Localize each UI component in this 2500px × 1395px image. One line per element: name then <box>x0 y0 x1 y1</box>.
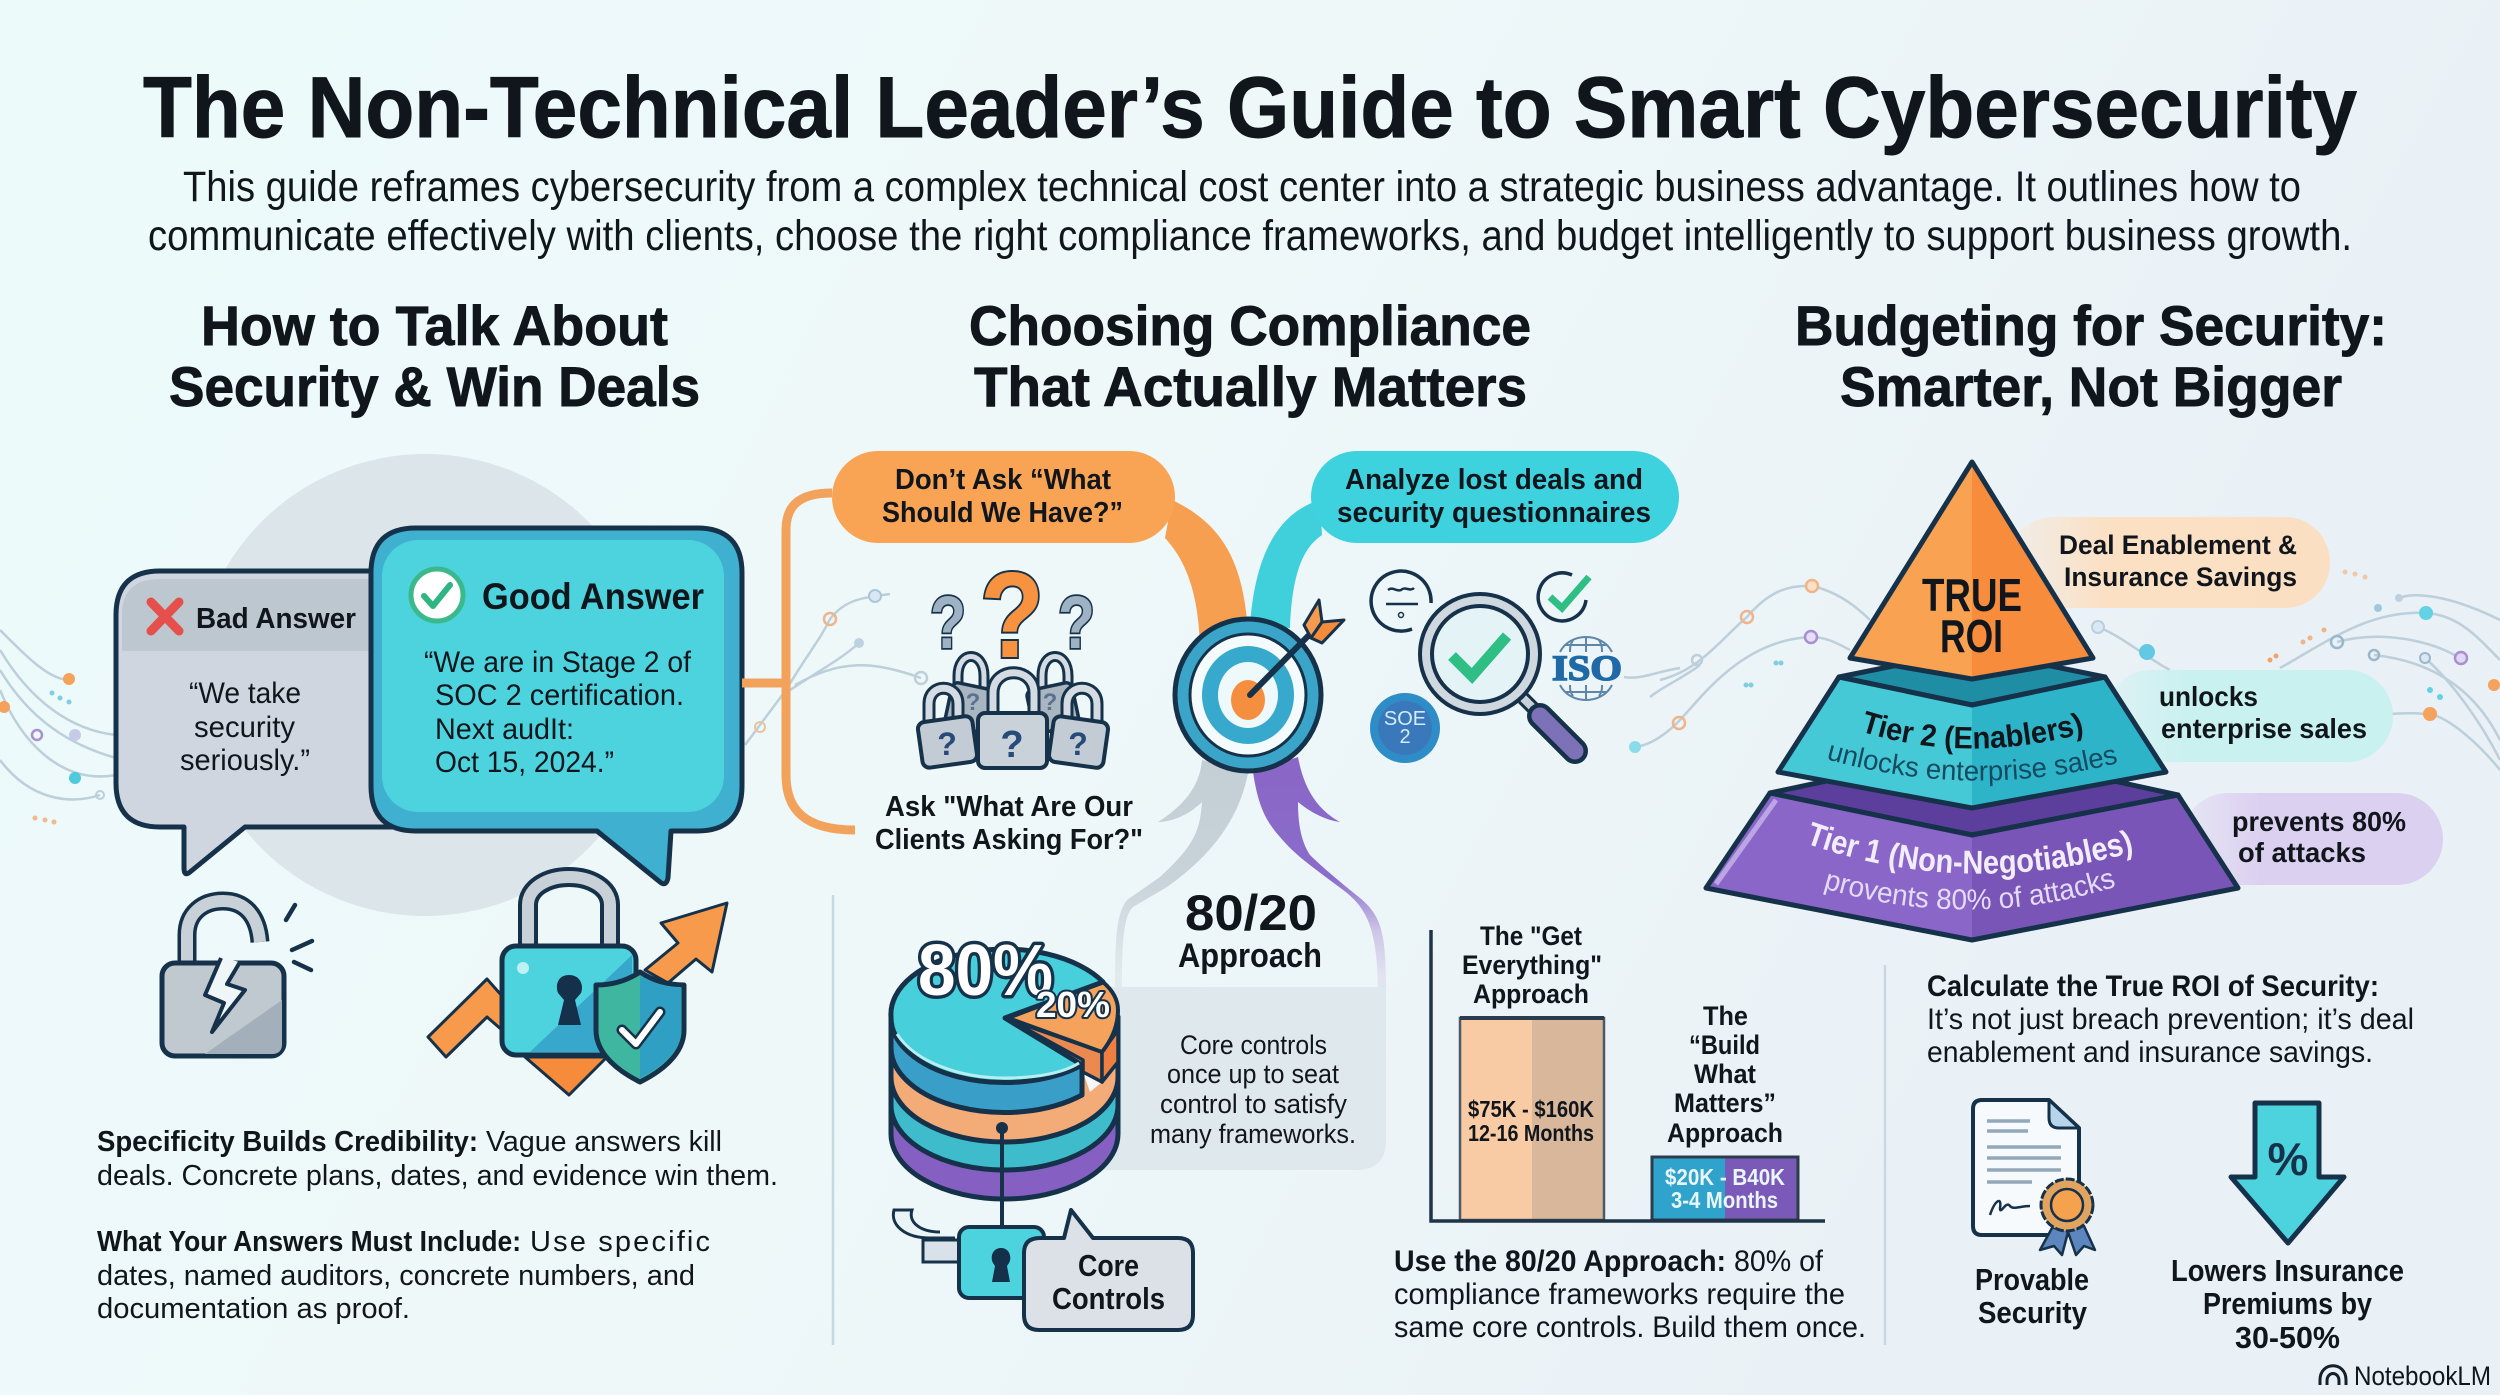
ribbon: orange to target <box>1165 500 1248 645</box>
bar: get everything: 12-16 Months <box>1468 1120 1594 1146</box>
top: true roi: TRUE <box>1922 569 2022 621</box>
icon: red x <box>151 602 179 631</box>
good answer quote <box>424 646 692 779</box>
label: build what matters <box>1667 1001 1783 1148</box>
icon: green check <box>411 569 463 621</box>
pill: don't ask: Don’t Ask “What <box>895 464 1111 496</box>
text block: use the 80/20 approach: compliance frameworks require the <box>1394 1278 1845 1311</box>
label: get everything: Everything" <box>1462 950 1602 980</box>
icon: magnifier with compliance badges: SOE <box>1384 708 1426 730</box>
ribbon: cyan to target <box>1250 500 1322 628</box>
icon: question marks and locks: ? <box>966 689 980 716</box>
pill: analyze lost deals <box>1311 451 1679 543</box>
pill: deal enablement: Insurance Savings <box>2064 562 2297 592</box>
tier 1: Tier 1 (Non-Negotiables) <box>1811 822 2132 880</box>
text block: specificity and answers: documentation as proof. <box>97 1293 410 1325</box>
pill: unlocks enterprise sales: enterprise sales <box>2161 713 2367 744</box>
arrow: orange bracket connector <box>742 493 855 830</box>
chart: security budget pyramid <box>1704 460 2240 942</box>
pill: prevents attacks: of attacks <box>2238 837 2366 868</box>
pill: unlocks enterprise sales <box>2105 670 2393 762</box>
text block: specificity and answers: dates, named auditors, concrete numbers, and <box>97 1260 695 1292</box>
heading: budgeting: Smarter, Not Bigger <box>1840 355 2342 418</box>
text block: calculate true roi: enablement and insurance savings. <box>1927 1036 2373 1069</box>
label: get everything <box>1462 921 1602 1009</box>
pill: prevents attacks: prevents 80% <box>2232 806 2406 837</box>
label: provable security <box>1975 1262 2089 1330</box>
80/20 heading: 80/20 <box>1185 885 1317 941</box>
label: lowers insurance premiums: 30-50% <box>2235 1320 2340 1355</box>
80% label: 80% <box>918 931 1053 1011</box>
heading: choosing compliance: That Actually Matters <box>974 355 1527 418</box>
icon: percent down arrow: % <box>2268 1133 2308 1185</box>
bad answer quote <box>180 677 310 777</box>
bar: build what matters: $20K - B40K <box>1665 1164 1785 1190</box>
bad answer quote: seriously.” <box>180 744 310 777</box>
80/20 description: many frameworks. <box>1150 1119 1356 1149</box>
icon: target with arrow <box>1175 600 1344 771</box>
top: true roi: ROI <box>1940 610 2003 662</box>
icon: question marks and locks: ? <box>1043 689 1057 716</box>
text block: specificity and answers: Specificity Builds Credibility: <box>97 1126 478 1158</box>
pill: analyze lost deals: Analyze lost deals and <box>1345 464 1643 496</box>
20% label: 20% <box>1036 984 1110 1025</box>
text block: specificity and answers: deals. Concrete plans, dates, and evidence win them. <box>97 1160 778 1192</box>
80/20 description: once up to seat <box>1167 1059 1339 1089</box>
icon: magnifier with compliance badges: ISO <box>1552 648 1622 688</box>
bad answer label: Bad Answer <box>196 603 356 635</box>
good answer quote: “We are in Stage 2 of <box>424 646 692 679</box>
icon: core controls lock and label: Controls <box>1052 1281 1165 1316</box>
divider lines <box>833 895 1885 1345</box>
label: ask what clients ask: Ask "What Are Our <box>885 791 1133 823</box>
label: get everything: Approach <box>1473 979 1589 1009</box>
icon: percent down arrow <box>2231 1103 2344 1243</box>
chart: approach cost comparison bars <box>1431 921 1825 1221</box>
panel: good answer bubble <box>371 528 742 884</box>
label: lowers insurance premiums <box>2171 1253 2404 1355</box>
heading: talk about security: How to Talk About <box>201 294 668 357</box>
ribbon: grey from target <box>1115 760 1248 987</box>
80/20 description: control to satisfy <box>1160 1089 1347 1119</box>
pill: deal enablement <box>2008 517 2330 608</box>
label: lowers insurance premiums: Premiums by <box>2203 1286 2373 1321</box>
panel: 80/20 approach card <box>1060 885 1386 1170</box>
tier 1: provents 80% of attacks <box>1823 872 2114 910</box>
icon: certified document <box>1973 1100 2095 1255</box>
pill: don't ask <box>832 451 1175 543</box>
80/20 description <box>1150 1030 1356 1149</box>
title: The Non-Technical Leader’s Guide to Smart Cybersecurity <box>143 60 2357 156</box>
text block: calculate true roi: Calculate the True ROI of Security: <box>1927 970 2379 1003</box>
label: ask what clients ask <box>875 791 1143 856</box>
backdrop circle <box>194 454 656 916</box>
label: provable security: Provable <box>1975 1262 2089 1297</box>
top: true roi <box>1850 462 2093 679</box>
bar: build what matters: 3-4 Months <box>1671 1187 1778 1213</box>
bar: get everything <box>1460 1018 1604 1220</box>
good answer quote: SOC 2 certification. <box>435 679 684 712</box>
icon: core controls lock and label <box>893 1122 1193 1330</box>
label: build what matters: “Build <box>1689 1030 1760 1060</box>
text block: specificity and answers: Use specific <box>530 1226 710 1258</box>
icon: question marks and locks <box>917 547 1109 769</box>
icon: question marks and locks: ? <box>937 726 957 762</box>
heading: choosing compliance: Choosing Compliance <box>969 294 1531 357</box>
good answer quote: Next audIt: <box>435 713 574 746</box>
label: build what matters: What <box>1694 1059 1756 1089</box>
icon: core controls lock and label: Core <box>1078 1248 1139 1283</box>
bar: get everything: $75K - $160K <box>1468 1096 1594 1122</box>
label: build what matters: The <box>1703 1001 1748 1031</box>
bad answer quote: security <box>194 711 295 744</box>
text block: specificity and answers <box>97 1126 778 1325</box>
text block: use the 80/20 approach: 80% of <box>1734 1245 1824 1278</box>
label: get everything: The "Get <box>1480 921 1582 951</box>
heading: talk about security: Security & Win Deals <box>169 355 700 418</box>
text block: use the 80/20 approach: Use the 80/20 Approach: <box>1394 1245 1726 1278</box>
heading: choosing compliance <box>969 294 1531 418</box>
intro paragraph: This guide reframes cybersecurity from a complex technical cost center into a strategic business advantage. It outlines how to <box>183 163 2301 211</box>
label: ask what clients ask: Clients Asking For?" <box>875 824 1143 856</box>
80/20 description: Core controls <box>1180 1030 1327 1060</box>
decorative network lines <box>0 570 2500 824</box>
heading: budgeting <box>1795 294 2387 418</box>
pill: unlocks enterprise sales: unlocks <box>2159 681 2258 712</box>
text block: use the 80/20 approach: same core controls. Build them once. <box>1394 1311 1866 1344</box>
icon: magnifier with compliance badges: 2 <box>1399 726 1411 748</box>
80/20 heading: Approach <box>1178 937 1322 975</box>
pill: prevents attacks <box>2182 793 2443 885</box>
icon: question marks and locks: ? <box>1000 724 1024 766</box>
icon: magnifier with compliance badges <box>1370 571 1622 763</box>
pill: deal enablement: Deal Enablement & <box>2059 530 2297 560</box>
icon: question marks and locks: ? <box>930 581 966 664</box>
bar: build what matters <box>1652 1157 1798 1220</box>
icon: secure lock with growth arrow and shield <box>428 877 727 1095</box>
icon: question marks and locks: ? <box>1058 581 1095 664</box>
pill: don't ask: Should We Have?” <box>882 497 1123 529</box>
80/20 heading <box>1178 885 1322 975</box>
label: build what matters: Approach <box>1667 1118 1783 1148</box>
label: provable security: Security <box>1978 1295 2088 1330</box>
ribbon: purple from target <box>1253 757 1386 987</box>
text block: specificity and answers: Vague answers kill <box>486 1126 722 1158</box>
heading: budgeting: Budgeting for Security: <box>1795 294 2387 357</box>
icon: broken lock <box>162 901 312 1056</box>
pill: analyze lost deals: security questionnaires <box>1337 497 1651 529</box>
chart: layered pie stack <box>891 931 1118 1199</box>
label: lowers insurance premiums: Lowers Insurance <box>2171 1253 2404 1288</box>
good answer quote: Oct 15, 2024.” <box>435 746 614 779</box>
text block: use the 80/20 approach <box>1394 1245 1866 1344</box>
icon: question marks and locks: ? <box>980 547 1044 683</box>
text block: calculate true roi <box>1927 970 2414 1069</box>
good answer label: Good Answer <box>482 576 704 617</box>
tier 1 <box>1704 781 2240 942</box>
panel: bad answer bubble <box>116 571 400 874</box>
icon: question marks and locks: ? <box>1068 726 1088 762</box>
tier 2 <box>1776 666 2168 810</box>
text block: calculate true roi: It’s not just breach prevention; it’s deal <box>1927 1003 2414 1036</box>
text block: specificity and answers: What Your Answers Must Include: <box>97 1226 521 1258</box>
tier 2: unlocks enterprise sales <box>1828 745 2117 786</box>
intro paragraph <box>148 163 2352 260</box>
bad answer quote: “We take <box>189 677 301 710</box>
heading: talk about security <box>169 294 700 418</box>
tier 2: Tier 2 (Enablers) <box>1866 710 2082 754</box>
label: build what matters: Matters” <box>1674 1088 1776 1118</box>
